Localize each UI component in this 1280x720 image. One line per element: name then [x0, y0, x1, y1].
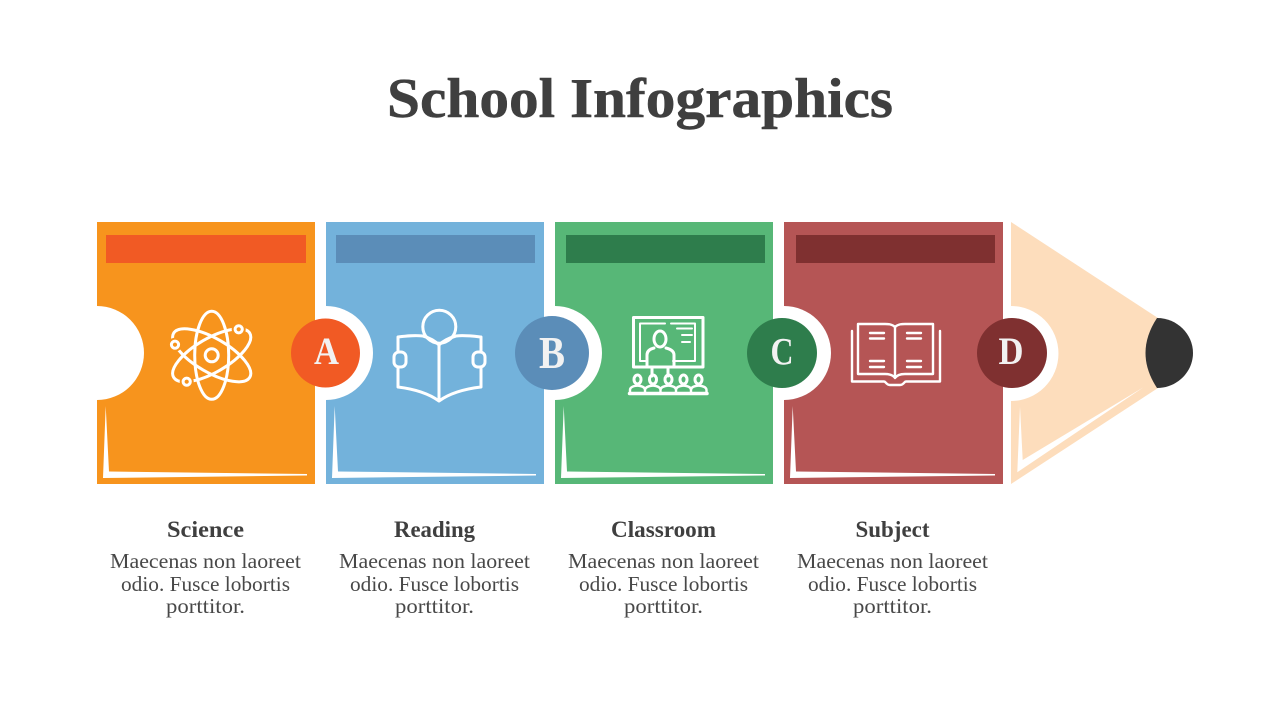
- pencil tip: [1011, 222, 1193, 484]
- badge A: A: [314, 330, 339, 373]
- text block: subject: [797, 517, 988, 618]
- icon: classroom teacher and students: [630, 318, 707, 394]
- text block: subject: porttitor.: [853, 594, 932, 618]
- text block: science: Maecenas non laoreet: [110, 549, 301, 573]
- text block: classroom: Classroom: [611, 517, 716, 542]
- text block: classroom: porttitor.: [624, 594, 703, 618]
- icon: open book: [852, 324, 940, 385]
- text block: science: odio. Fusce lobortis: [121, 572, 290, 596]
- text block: reading: [339, 517, 530, 618]
- badge A: [291, 318, 360, 388]
- panel: classroom pencil segment: [555, 222, 773, 484]
- text block: subject: Subject: [856, 517, 930, 542]
- panel: science pencil segment: [97, 222, 315, 484]
- badge B: [515, 316, 589, 390]
- badge D: D: [998, 330, 1024, 373]
- text block: reading: odio. Fusce lobortis: [350, 572, 519, 596]
- badge C: [747, 318, 817, 388]
- text block: classroom: odio. Fusce lobortis: [579, 572, 748, 596]
- text block: reading: Maecenas non laoreet: [339, 549, 530, 573]
- text block: reading: porttitor.: [395, 594, 474, 618]
- title: School Infographics: [387, 68, 893, 130]
- pencil lead: [1146, 318, 1193, 388]
- icon: reader with book: [394, 310, 485, 401]
- text block: subject: Maecenas non laoreet: [797, 549, 988, 573]
- icon: atom: [165, 311, 258, 399]
- panel: reading pencil segment: [326, 222, 544, 484]
- text block: reading: Reading: [394, 517, 475, 542]
- text block: science: Science: [167, 517, 244, 542]
- text block: subject: odio. Fusce lobortis: [808, 572, 977, 596]
- text block: science: [110, 517, 301, 618]
- badge C: C: [770, 330, 794, 374]
- text block: science: porttitor.: [166, 594, 245, 618]
- text block: classroom: Maecenas non laoreet: [568, 549, 759, 573]
- badge B: B: [539, 328, 565, 378]
- panel: subject pencil segment: [784, 222, 1003, 484]
- badge D: [977, 318, 1047, 388]
- text block: classroom: [568, 517, 759, 618]
